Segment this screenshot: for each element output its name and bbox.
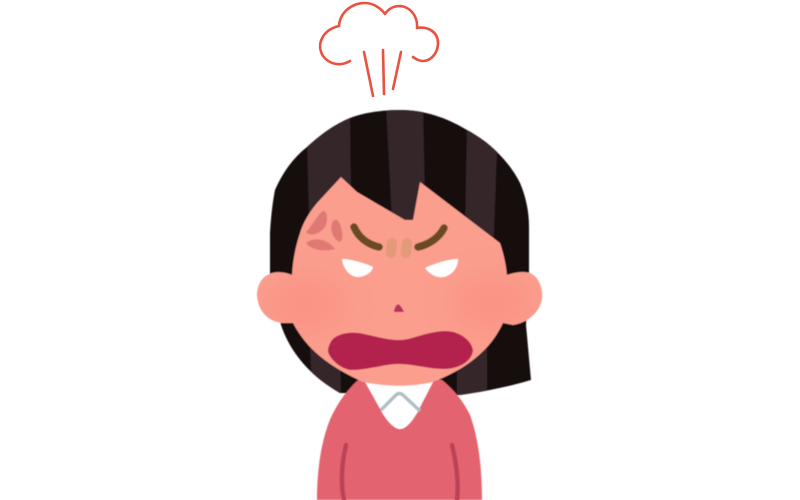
collar fold [381,394,420,411]
anger mark [306,211,342,250]
character artwork [257,100,542,500]
cheek blush [263,275,534,333]
icon: steam cloud [320,3,438,96]
eyebrows [354,227,444,247]
sweater [317,372,482,500]
face and ears [257,177,542,386]
sleeve lines [342,445,458,500]
nose [394,304,404,312]
brow furrow [391,243,407,253]
illustration: angry woman [256,2,543,500]
eyes [342,259,458,277]
hair [269,109,532,396]
shirt collar [364,380,434,429]
mouth [328,331,473,370]
